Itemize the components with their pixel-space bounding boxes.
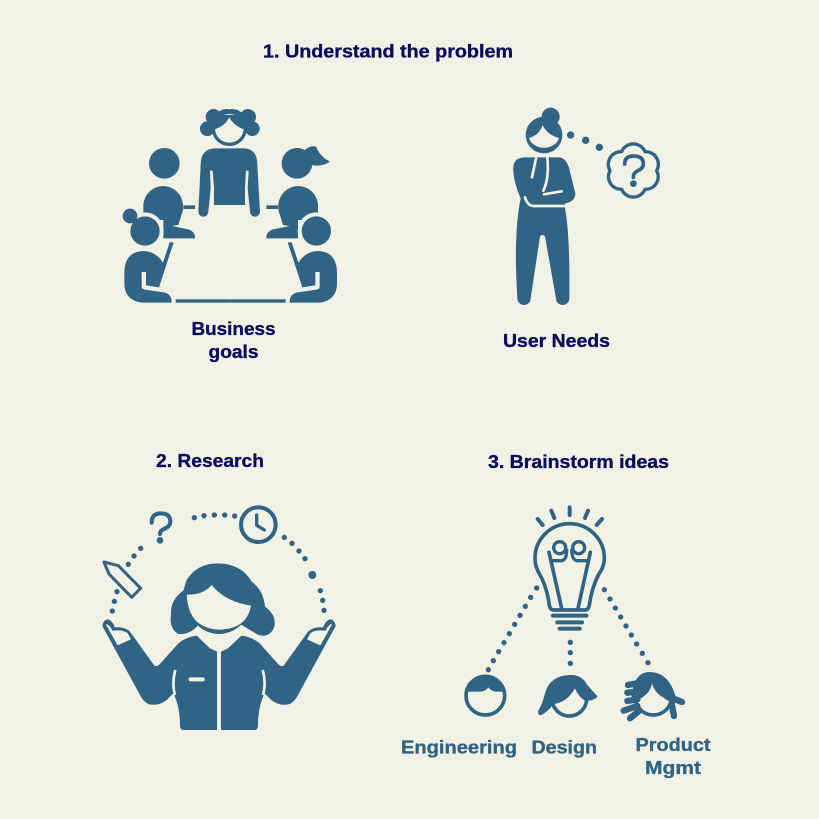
icon: engineering face <box>466 676 505 715</box>
icon: bun of left person <box>123 209 137 223</box>
icon: pencil <box>104 562 141 597</box>
label: Business goals: goals <box>208 342 258 362</box>
icon: left arm and jacket <box>102 619 217 730</box>
icon: question mark <box>152 513 170 544</box>
icon: left group <box>124 148 231 303</box>
icon: light bulb with team <box>466 507 682 718</box>
icon: woman juggling research tasks <box>102 507 336 730</box>
icon: hair and face <box>171 563 275 636</box>
dotted arc <box>110 512 327 614</box>
icon: clock <box>241 507 276 542</box>
icon: center woman <box>198 109 260 217</box>
icon: light rays <box>538 507 602 525</box>
icon: design face <box>538 675 598 716</box>
icon: product face <box>624 672 682 718</box>
icon: ponytail <box>304 146 330 166</box>
heading: 3. Brainstorm ideas: 3. Brainstorm ideas <box>488 452 669 472</box>
label: Business goals <box>192 319 276 362</box>
label: User Needs: User Needs <box>503 331 610 351</box>
label: Product Mgmt: Product <box>636 735 710 755</box>
icon: right group <box>231 148 337 303</box>
icon: woman <box>513 108 575 305</box>
palms and seams <box>106 624 332 695</box>
icon: right arm and jacket <box>221 619 336 730</box>
dotted connectors <box>486 585 651 672</box>
label: Product Mgmt <box>636 735 710 778</box>
icon: question bubble <box>608 144 658 197</box>
label: Business goals: Business <box>192 319 276 339</box>
icon: bulb <box>535 524 604 629</box>
icon: business meeting around a table <box>123 109 337 303</box>
label: Engineering: Engineering <box>401 738 517 758</box>
label: Product Mgmt: Mgmt <box>645 758 701 778</box>
thought dots <box>567 131 603 151</box>
icon: thinking woman with question bubble <box>513 108 658 305</box>
title: 1. Understand the problem: 1. Understand the problem <box>263 42 513 62</box>
label: Design: Design <box>532 738 597 758</box>
heading: 2. Research: 2. Research <box>156 451 264 471</box>
